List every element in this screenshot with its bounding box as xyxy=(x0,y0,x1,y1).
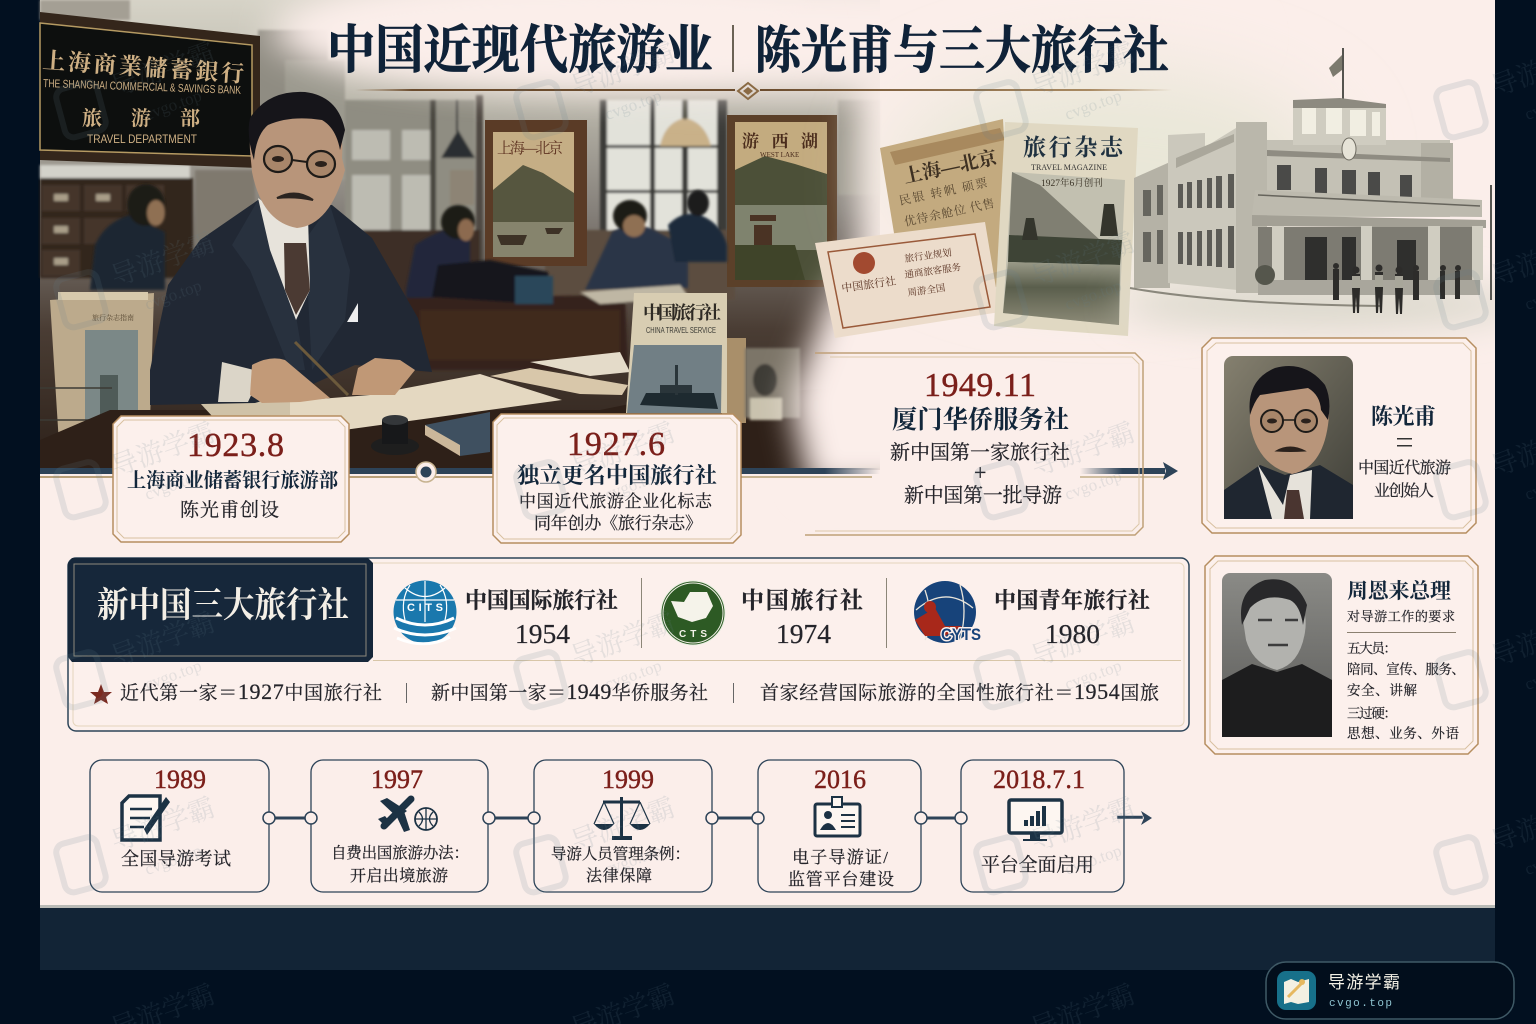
watermarks: cvgo.top xyxy=(1062,86,1124,124)
panel: Chen Guangfu xyxy=(1202,338,1476,533)
logo: CTS: CTS xyxy=(679,629,707,640)
icon: plane and globe xyxy=(378,798,437,832)
watermarks: 导游学霸 xyxy=(107,792,219,857)
wall sign: bank travel department: THE SHANGHAI COMMERCIAL & SAVINGS BANK xyxy=(43,78,241,97)
milestone card: 2016 xyxy=(758,760,921,892)
timeline bar xyxy=(40,462,1178,480)
clerks at mid-room desk xyxy=(405,190,727,370)
milestone card: 1999: 法律保障 xyxy=(586,867,652,885)
key facts row: 近代第一家＝1927中国旅行社 xyxy=(120,679,382,704)
watermarks: 导游学霸 xyxy=(567,792,679,857)
logo: CYTS: CYTS xyxy=(941,625,981,644)
panel: Zhou Enlai: 五大员： xyxy=(1347,640,1397,656)
key facts row: 首家经营国际旅游的全国性旅行社＝1954国旅 xyxy=(760,679,1159,704)
icon: monitor with bar chart xyxy=(1009,800,1062,841)
card: China Travel Service: 旅行业规划 xyxy=(904,246,952,265)
panel: Zhou Enlai: 思想、业务、外语 xyxy=(1347,725,1460,741)
right hero tint xyxy=(890,70,1330,270)
panel: Zhou Enlai xyxy=(1205,556,1478,754)
milestone card: 2018.7.1: 2018.7.1 xyxy=(993,765,1085,794)
watermarks: cvgo.top xyxy=(602,656,664,694)
milestone card: 2018.7.1 xyxy=(961,760,1124,892)
watermarks: 导游学霸 xyxy=(107,227,219,292)
panel: Zhou Enlai: 对导游工作的要求 xyxy=(1347,609,1455,624)
China Travel Service booklet xyxy=(626,293,746,423)
card: 1949.11: 1949.11 xyxy=(924,367,1036,404)
card: China Travel Service xyxy=(815,222,1000,338)
arrow: timeline continues xyxy=(1118,811,1152,825)
watermarks: 导游学霸 xyxy=(1027,792,1139,857)
watermarks: 导游学霸 xyxy=(107,417,219,482)
card: 1949.11: 新中国第一批导游 xyxy=(904,484,1062,507)
magazine: 旅行杂志: 1927年6月创刊 xyxy=(1041,177,1103,189)
watermarks: cvgo.top xyxy=(142,841,204,879)
icon: guide ID badge xyxy=(815,797,860,836)
China Travel Service booklet: CHINA TRAVEL SERVICE xyxy=(646,326,716,335)
wall sign: bank travel department xyxy=(40,12,260,168)
title xyxy=(327,22,1169,80)
agency: CTS: 中国旅行社 xyxy=(741,588,863,613)
card: China Travel Service: 中国旅行社 xyxy=(840,273,897,295)
card: 1927.6: 同年创办《旅行杂志》 xyxy=(534,513,702,533)
panel: three major travel agencies xyxy=(68,558,1189,731)
card: 1923.8: 陈光甫创设 xyxy=(180,499,279,521)
milestone card: 1997: 自费出国旅游办法： xyxy=(331,844,469,862)
card: 1927.6: 独立更名中国旅行社 xyxy=(517,463,717,488)
panel: Zhou Enlai: 陪同、宣传、服务、 xyxy=(1347,662,1465,677)
poster: Shanghai to Beijing: 上海—北京 xyxy=(497,140,563,157)
main desk with papers xyxy=(40,352,880,470)
card: China Travel Service: 通商旅客服务 xyxy=(904,261,962,281)
agency: CITS: 1954 xyxy=(515,618,570,649)
card: 1923.8: 1923.8 xyxy=(187,427,284,464)
watermarks: 导游学霸 xyxy=(567,607,679,672)
clerk at filing cabinet xyxy=(90,184,165,290)
watermarks: cvgo.top xyxy=(1062,656,1124,694)
agency: CYTS xyxy=(994,588,1150,649)
milestone card: 2016: 2016 xyxy=(814,765,866,794)
magazine: 旅行杂志 xyxy=(994,122,1138,336)
heading: 新中国三大旅行社 xyxy=(68,558,373,662)
watermarks: 导游学霸 xyxy=(567,37,679,102)
card: 1949.11: 新中国第一家旅行社 xyxy=(890,441,1070,464)
panel: Zhou Enlai: 三过硬： xyxy=(1347,706,1397,721)
agency: CYTS: 中国青年旅行社 xyxy=(994,588,1150,613)
watermarks: 导游学霸 xyxy=(1027,417,1139,482)
panel: Chen Guangfu: 中国近代旅游 xyxy=(1358,459,1451,477)
watermarks: cvgo.top xyxy=(1062,276,1124,314)
photo: travel service building xyxy=(1120,48,1520,331)
footer brand badge: 导游学霸 xyxy=(1328,973,1400,992)
icon: brand map xyxy=(1277,971,1316,1010)
forecourt ground xyxy=(1120,279,1520,331)
document stack in wire rack xyxy=(40,292,154,460)
portrait: Zhou Enlai xyxy=(1222,573,1332,737)
milestone card: 2016: 监管平台建设 xyxy=(788,870,894,889)
footer brand badge: cvgo.top xyxy=(1329,998,1392,1010)
logo: CITS xyxy=(394,580,456,644)
fade: title backdrop xyxy=(270,0,1250,92)
China Travel Service booklet: 中国旅行社 xyxy=(643,303,721,323)
watermarks: 导游学霸 xyxy=(1027,607,1139,672)
ticket: Shanghai to Beijing: 优待余舱位 代售 xyxy=(903,195,996,229)
wall sign: bank travel department: TRAVEL DEPARTMENT xyxy=(87,132,198,146)
milestone card: 1999 xyxy=(534,760,712,892)
magazine: 旅行杂志: TRAVEL MAGAZINE xyxy=(1031,163,1107,172)
milestone card: 1989: 全国导游考试 xyxy=(121,849,231,869)
watermarks: cvgo.top xyxy=(142,656,204,694)
milestone card: 1989 xyxy=(90,760,269,892)
flag and pole xyxy=(1329,48,1344,100)
milestone card: 2018.7.1: 平台全面启用 xyxy=(981,854,1094,876)
hero photo: shanghai travel department office xyxy=(40,0,1250,490)
watermarks: cvgo.top xyxy=(1062,466,1124,504)
magazine: 旅行杂志: 旅行杂志 xyxy=(1023,135,1125,160)
panel: Zhou Enlai: 安全、讲解 xyxy=(1347,683,1418,698)
footer strip xyxy=(40,908,1495,970)
card: 1927.6 xyxy=(493,414,741,543)
panel: Chen Guangfu: 陈光甫 xyxy=(1371,404,1436,429)
timeline node xyxy=(416,462,436,482)
key facts row: 新中国第一家＝1949华侨服务社 xyxy=(431,679,708,704)
watermarks: cvgo.top xyxy=(142,466,204,504)
document stack in wire rack: 旅行杂志指南 xyxy=(92,313,134,322)
poster: West Lake xyxy=(727,115,837,287)
milestone card: 1999: 导游人员管理条例： xyxy=(551,845,690,863)
panel: Zhou Enlai: 周恩来总理 xyxy=(1347,579,1451,603)
connector nodes xyxy=(263,812,967,824)
milestone card: 1997: 开启出境旅游 xyxy=(350,867,448,885)
watermarks: 导游学霸 xyxy=(1027,227,1139,292)
ticket: Shanghai to Beijing: 民银 转帆 硕票 xyxy=(898,175,989,208)
wall sign: bank travel department: 旅 游 部 xyxy=(82,107,200,130)
portrait: Chen Guangfu at desk xyxy=(150,92,432,405)
agency: CTS xyxy=(741,588,863,649)
crowd in front of the entrance xyxy=(1333,263,1461,314)
card: 1923.8 xyxy=(113,416,349,542)
card: 1923.8: 上海商业储蓄银行旅游部 xyxy=(127,469,338,492)
watermarks: cvgo.top xyxy=(602,841,664,879)
fade to page xyxy=(790,70,980,490)
card: 1949.11 xyxy=(805,353,1143,535)
watermarks: cvgo.top xyxy=(602,86,664,124)
card: 1927.6: 1927.6 xyxy=(567,426,665,463)
agency: CTS: 1974 xyxy=(776,618,831,649)
logo: CYTS xyxy=(914,581,981,644)
card: 1927.6: 中国近代旅游企业化标志 xyxy=(519,492,713,511)
desk instruments xyxy=(745,348,800,420)
agency: CITS xyxy=(465,588,618,649)
watermarks: 导游学霸 xyxy=(107,37,219,102)
logo: CITS: CITS xyxy=(407,602,443,614)
icon: exam paper and pen xyxy=(122,796,170,840)
milestone card: 2016: 电子导游证/ xyxy=(792,848,888,867)
ticket: Shanghai to Beijing: 上海—北京 xyxy=(901,145,1000,188)
agency: CYTS: 1980 xyxy=(1045,618,1100,649)
footer brand badge xyxy=(1266,962,1514,1019)
watermarks: cvgo.top xyxy=(602,466,664,504)
poster: West Lake: WEST LAKE xyxy=(760,151,799,159)
panel: Chen Guangfu: 业创始人 xyxy=(1374,482,1434,500)
icon: scales of justice xyxy=(594,797,650,840)
watermarks: cvgo.top xyxy=(142,86,204,124)
watermarks: 导游学霸 xyxy=(1027,37,1139,102)
card: 1949.11: 厦门华侨服务社 xyxy=(892,405,1069,434)
milestone card: 1989: 1989 xyxy=(154,765,206,794)
wall sign: bank travel department: 上海商業儲蓄銀行 xyxy=(42,47,245,87)
card: China Travel Service: 周游全国 xyxy=(907,282,946,299)
milestone card: 1999: 1999 xyxy=(602,765,654,794)
poster: West Lake: 游 西 湖 xyxy=(742,132,818,151)
heading: 新中国三大旅行社: 新中国三大旅行社 xyxy=(97,586,349,625)
collage: tickets and travel magazine xyxy=(815,119,1138,338)
connectors between milestone cards xyxy=(269,816,961,820)
watermarks: cvgo.top xyxy=(142,276,204,314)
poster: Shanghai to Beijing xyxy=(485,120,587,266)
key facts row xyxy=(90,679,1159,704)
milestone card: 1997 xyxy=(311,760,488,892)
card: 1949.11: + xyxy=(974,460,986,485)
logo: CTS xyxy=(661,581,725,645)
title: 中国近现代旅游业 xyxy=(327,22,713,80)
ticket: Shanghai to Beijing xyxy=(880,119,1012,300)
portrait: Chen Guangfu xyxy=(1224,356,1353,519)
agency: CITS: 中国国际旅行社 xyxy=(465,588,618,613)
watermarks: 导游学霸 xyxy=(107,607,219,672)
watermarks: 导游学霸 xyxy=(567,417,679,482)
title: 陈光甫与三大旅行社 xyxy=(755,23,1169,80)
title ornament rule xyxy=(355,83,1172,99)
watermarks: cvgo.top xyxy=(1062,841,1124,879)
milestone card: 1997: 1997 xyxy=(371,765,423,794)
